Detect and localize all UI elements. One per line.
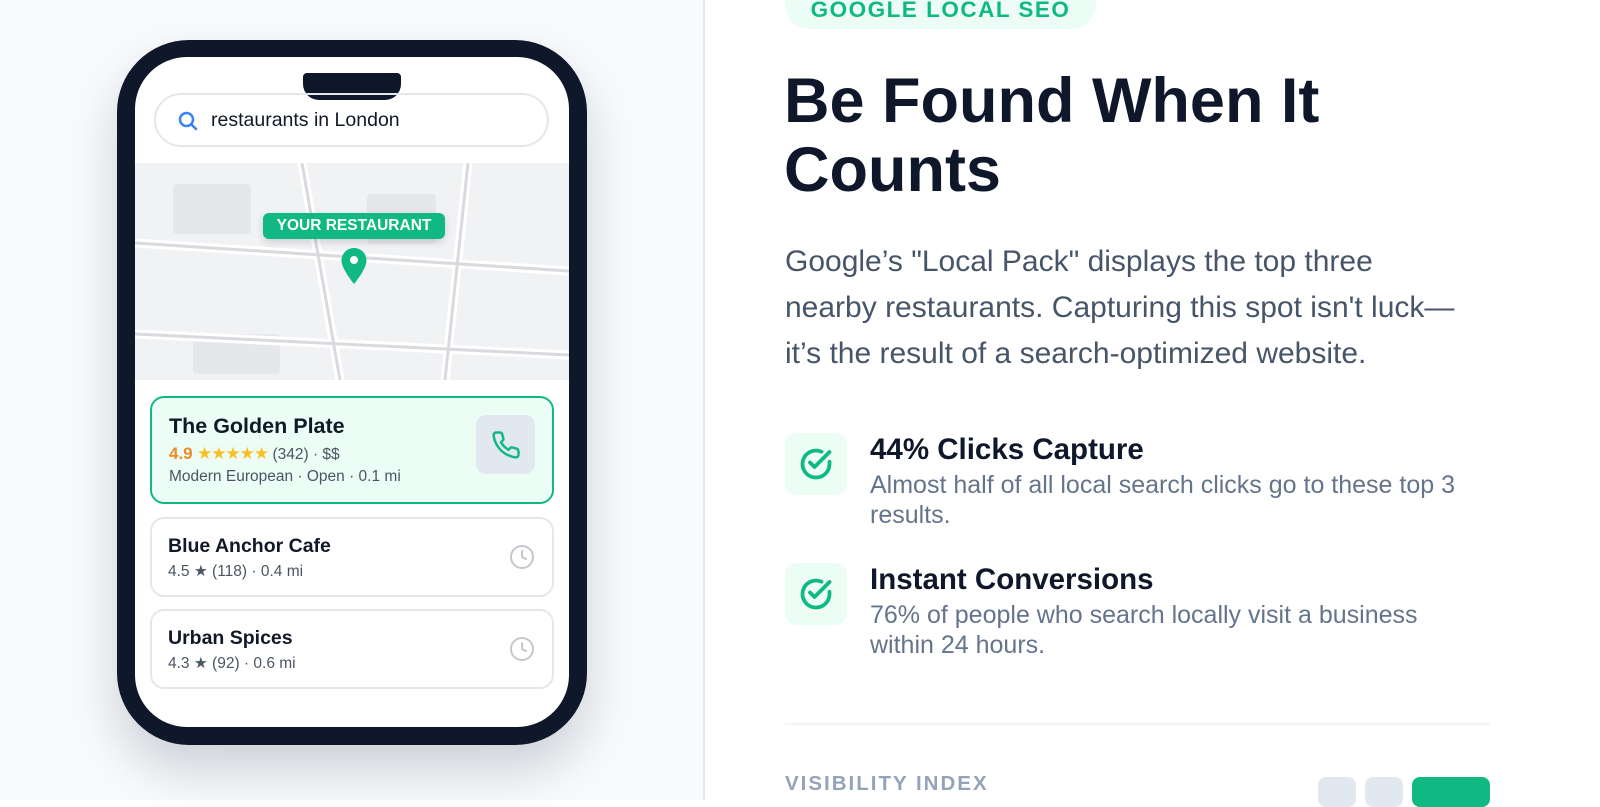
listing: blue anchor cafe: 4.5 ★ (118) · 0.4 mi <box>168 563 303 580</box>
icon: map pin <box>342 248 366 284</box>
listing: blue anchor cafe: Blue Anchor Cafe <box>168 535 331 557</box>
icon: search <box>178 112 198 130</box>
phone screen <box>135 57 569 727</box>
icon: phone call <box>476 415 535 474</box>
feature: instant conversions: within 24 hours. <box>870 631 1045 659</box>
notch <box>303 73 401 100</box>
listing: the golden plate: Modern European · Open · 0.1 mi <box>169 468 401 485</box>
visibility index label: VISIBILITY INDEX <box>785 772 989 795</box>
icon: check <box>785 433 847 495</box>
feature: clicks capture: Almost half of all local search clicks go to these top 3 <box>870 471 1455 499</box>
paragraph: Google’s "Local Pack" displays the top three <box>785 245 1373 278</box>
feature: instant conversions <box>785 563 1418 659</box>
paragraph: it’s the result of a search-optimized website. <box>785 337 1366 370</box>
paragraph <box>785 245 1454 370</box>
feature: clicks capture <box>785 433 1455 529</box>
map label: your restaurant <box>263 213 445 239</box>
left panel background <box>0 0 705 800</box>
feature: instant conversions: Instant Conversions <box>870 563 1154 596</box>
badge: google local seo <box>785 0 1096 29</box>
listing: blue anchor cafe <box>150 517 554 597</box>
feature: clicks capture: 44% Clicks Capture <box>870 433 1144 466</box>
icon: check <box>785 563 847 625</box>
map label: your restaurant: YOUR RESTAURANT <box>277 217 431 234</box>
listing: urban spices: Urban Spices <box>168 627 293 649</box>
paragraph: nearby restaurants. Capturing this spot isn't luck— <box>785 291 1454 324</box>
listing: the golden plate <box>150 396 554 504</box>
visibility bars <box>1318 777 1490 807</box>
listing: the golden plate: The Golden Plate <box>169 414 345 438</box>
title: Be Found When It <box>784 66 1319 136</box>
icon: clock <box>510 637 534 661</box>
title <box>784 66 1319 205</box>
search bar: restaurants in London <box>211 109 400 131</box>
feature: clicks capture: results. <box>870 501 951 529</box>
title: Counts <box>784 135 1001 205</box>
listing: urban spices <box>150 609 554 689</box>
icon: clock <box>510 545 534 569</box>
listing: urban spices: 4.3 ★ (92) · 0.6 mi <box>168 655 296 672</box>
map <box>135 163 569 380</box>
listing: the golden plate: 4.9 ★★★★★ (342) · $$ <box>169 444 340 463</box>
feature: instant conversions: 76% of people who search locally visit a business <box>870 601 1418 629</box>
phone mockup <box>117 40 587 745</box>
search bar <box>154 93 549 147</box>
